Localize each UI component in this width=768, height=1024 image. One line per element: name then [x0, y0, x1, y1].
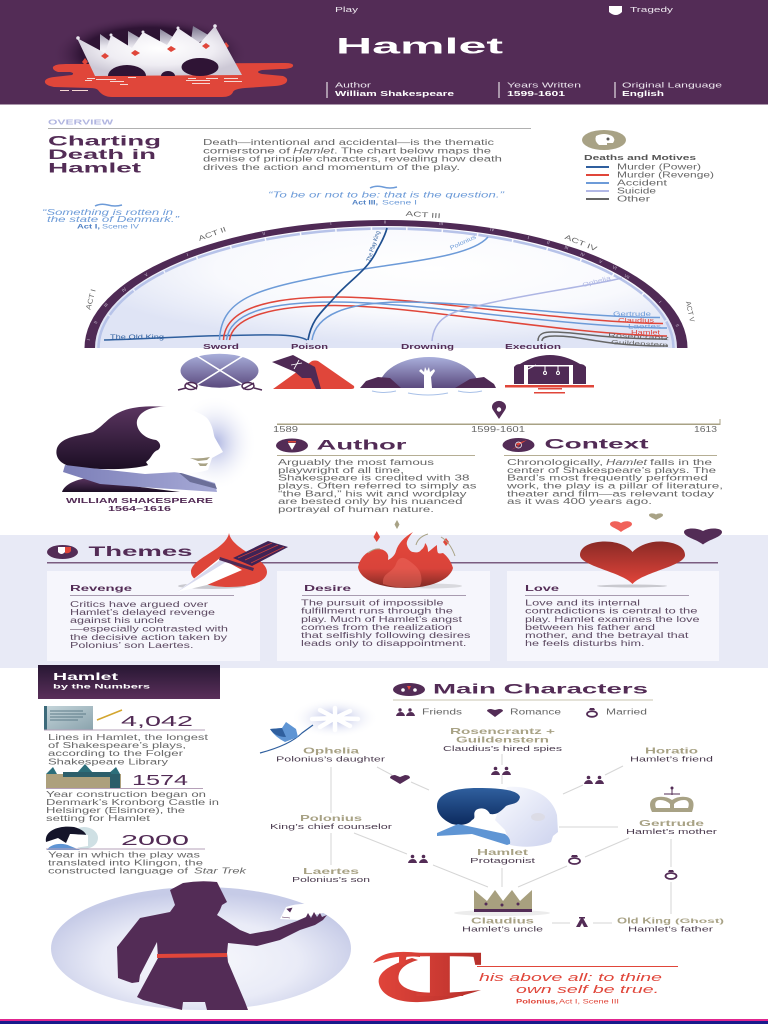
quote: something is rotten: Scene IV: [102, 224, 139, 230]
scene numerals: IV: [580, 252, 585, 258]
icon: map pin: [492, 401, 506, 419]
panel: author: Shakespeare is credited with 38: [278, 474, 470, 482]
icon: compass: [502, 438, 534, 452]
character labels: Polonius: [449, 235, 477, 252]
heading box: by the Numbers: [53, 684, 151, 690]
panel: author: “the Bard,” his wit and wordplay: [278, 490, 467, 498]
card: love: play. Hamlet examines the love: [525, 615, 700, 624]
scene numerals: I: [86, 339, 91, 341]
character: Polonius: Polonius: [300, 813, 362, 823]
scene numerals: VI: [612, 264, 618, 271]
character: Old King: [617, 916, 724, 934]
panel: context: work, the play is a pillar of literature,: [505, 482, 723, 490]
legend: deaths and motives: Accident: [617, 178, 668, 188]
quote: to be or not to be: “To be or not to be: that is the question.”: [268, 190, 506, 200]
card: desire: comes from the realization: [301, 623, 452, 632]
pull quote: [373, 938, 678, 1011]
panel: author: plays. Often referred to simply as: [278, 482, 477, 490]
relationship connectors: [331, 754, 671, 923]
character: Old King: Hamlet’s father: [628, 924, 714, 934]
scene numerals: V: [598, 259, 603, 265]
character: Gertrude: [626, 786, 718, 836]
stat: lines: [44, 706, 209, 766]
stat: castle: [46, 764, 219, 823]
legend: deaths and motives: [582, 130, 715, 204]
character: Rosencrantz and Guildenstern: Rosencrantz +: [450, 726, 555, 736]
scene numerals: II: [547, 240, 550, 245]
stat: castle: Helsinger (Elsinore), the: [46, 806, 185, 815]
character: Laertes: [292, 866, 370, 884]
panel: context: falls in the: [650, 458, 712, 467]
stat: klingon: translated into Klingon, the: [48, 858, 203, 868]
legend: relationships: Married: [606, 708, 647, 716]
stat: lines: 4,042: [121, 713, 193, 730]
overview paragraph: Hamlet: [293, 146, 335, 156]
act labels: ACT III: [405, 211, 441, 220]
method: drowning: [360, 342, 496, 395]
drop cap: [373, 938, 483, 1011]
character labels: Claudius: [618, 318, 654, 324]
overview paragraph: drives the action and momentum of the play.: [203, 163, 460, 172]
legend: deaths and motives: Murder (Power): [617, 162, 702, 172]
chart: death arc: [84, 211, 695, 349]
stat: lines: Shakespeare Library: [48, 758, 168, 766]
character: Hamlet: Hamlet: [477, 847, 528, 857]
panel: context: Chronologically,: [507, 458, 603, 467]
character: Hamlet: Protagonist: [470, 856, 535, 865]
header banner: [0, 0, 768, 104]
card: desire: leads only to disappointment.: [301, 639, 466, 648]
icon: skull in hand: [280, 904, 327, 920]
stat: klingon: constructed language of: [48, 866, 189, 876]
scene numerals: IV: [490, 227, 495, 232]
card: love: mother, and the betrayal that: [525, 631, 690, 640]
stat: lines: according to the Folger: [48, 749, 184, 758]
heading: charting death: Charting: [48, 132, 161, 148]
character: Gertrude: Gertrude: [639, 818, 704, 828]
icon: pen nib: [276, 438, 308, 452]
years meta: 1599-1601: [507, 89, 565, 98]
card: revenge: [47, 571, 260, 661]
overview paragraph: [203, 138, 502, 172]
quote: something is rotten: “Something is rotten in: [42, 208, 174, 217]
panel: author: are bested only by his nuanced: [278, 497, 462, 506]
author meta: Author: [335, 80, 372, 90]
card: revenge: —especially contrasted with: [70, 624, 228, 634]
character: Horatio: [630, 746, 713, 764]
panel: author: Author: [316, 438, 408, 452]
card: desire: [277, 571, 490, 661]
heading box: Hamlet: [53, 672, 119, 683]
panel: author: playwright of all time,: [278, 466, 404, 475]
act labels: ACT I: [85, 289, 98, 311]
scene numerals: VII: [623, 273, 630, 280]
bottom strip: [0, 1019, 768, 1024]
character: Ophelia: Polonius’s daughter: [276, 754, 386, 764]
legend: relationships: [396, 708, 647, 717]
timeline: 1589: [273, 425, 298, 434]
panel: context: Hamlet: [606, 458, 648, 467]
icon: document and quill: [44, 706, 122, 730]
character: Claudius: [454, 890, 550, 934]
method: execution: Execution: [505, 342, 562, 351]
icon: skull: [582, 130, 626, 150]
stat: castle: Year construction began on: [46, 790, 206, 799]
overview paragraph: cornerstone of: [203, 146, 291, 156]
card: revenge: Hamlet’s delayed revenge: [70, 608, 215, 617]
panel: by the numbers: [38, 665, 248, 876]
icon: flame: [358, 520, 462, 588]
character: Ophelia: Ophelia: [303, 746, 359, 756]
card: revenge: Critics have argued over: [70, 600, 209, 609]
death lines: [104, 228, 668, 346]
portrait: Shakespeare: [56, 395, 257, 513]
character labels: Guildenstern: [611, 340, 668, 349]
icon: Kronborg castle: [46, 764, 121, 789]
character labels: Ophelia: [582, 275, 612, 289]
scene numerals: [86, 220, 680, 341]
character: Laertes: Polonius’s son: [292, 875, 370, 884]
card: revenge: against his uncle: [70, 616, 164, 625]
scene numerals: II: [384, 220, 386, 224]
method: sword: [178, 342, 262, 390]
stat: castle: Denmark’s Kronborg Castle in: [46, 798, 219, 807]
character: Polonius: King’s chief counselor: [270, 822, 393, 831]
stat: klingon: Year in which the play was: [48, 850, 200, 860]
heading: main characters: Main Characters: [433, 680, 648, 696]
overview paragraph: Death—intentional and accidental—is the thematic: [203, 138, 494, 147]
language meta: [622, 80, 722, 98]
heading: charting death: Death in: [48, 146, 156, 162]
icon: blood drop and dagger: [177, 533, 288, 592]
scene numerals: I: [186, 252, 189, 257]
method: poison: [272, 342, 354, 389]
card: love: Love and its internal: [525, 598, 640, 608]
card: revenge: the decisive action taken by: [70, 633, 227, 642]
legend: relationships: Friends: [422, 708, 462, 716]
legend: deaths and motives: Suicide: [617, 186, 656, 196]
method: sword: Sword: [203, 342, 240, 351]
pull quote: his above all: to thine: [479, 972, 662, 984]
play label: Play: [335, 5, 358, 14]
panel: context: Context: [544, 436, 650, 452]
legend: deaths and motives: Murder (Revenge): [617, 170, 715, 180]
character labels: Hamlet: [631, 330, 660, 336]
card: revenge: Polonius’ son Laertes.: [70, 641, 194, 650]
character labels: Laertes: [628, 324, 661, 330]
character: Hamlet: [437, 787, 558, 865]
method: poison: Poison: [291, 342, 329, 351]
character labels: Gertrude: [613, 312, 652, 318]
heading: charting death: Hamlet: [48, 160, 142, 176]
stat: klingon: [46, 827, 248, 876]
years meta: Years Written: [507, 80, 581, 90]
act labels: [85, 211, 695, 323]
panel: context: as it was 400 years ago.: [507, 497, 652, 506]
scene numerals: III: [103, 302, 109, 308]
language meta: English: [622, 89, 665, 98]
character: Rosencrantz and Guildenstern: [443, 726, 563, 753]
title: Hamlet: [336, 34, 505, 58]
quote: something is rotten: the state of Denmark.”: [47, 215, 180, 224]
pull quote: own self be true.: [516, 984, 659, 996]
card: love: between his father and: [525, 623, 655, 632]
panel: themes: [0, 513, 768, 668]
character: Claudius: Hamlet’s uncle: [462, 924, 543, 934]
character: Polonius: [270, 813, 393, 831]
quote: something is rotten: [42, 204, 180, 230]
stat: klingon: 2000: [121, 832, 189, 849]
character labels: [110, 230, 669, 349]
card: desire: that selfishly following desires: [301, 631, 471, 640]
pull quote: Polonius,: [516, 1000, 559, 1006]
scene numerals: II: [675, 323, 680, 328]
timeline: 1599-1601: [471, 425, 525, 434]
quote: to be or not to be: [268, 186, 506, 206]
panel: main characters: [260, 680, 724, 934]
legend: deaths and motives: Other: [617, 194, 651, 204]
character: Old King: Old King: [617, 916, 671, 926]
illustration: Hamlet with skull: [51, 881, 351, 1010]
card: love: he feels disturbs him.: [525, 639, 644, 648]
pull quote: Act I, Scene III: [559, 1000, 619, 1006]
panel: author: [276, 438, 477, 514]
character: Horatio: Hamlet’s friend: [630, 754, 713, 764]
panel: context: center of Shakespeare’s plays. The: [507, 466, 716, 475]
quote: something is rotten: Act I,: [77, 224, 101, 230]
icon: Spock head: [46, 827, 98, 850]
scene numerals: III: [439, 221, 443, 226]
overview paragraph: demise of principle characters, revealing how death: [203, 154, 502, 164]
panel: author: Arguably the most famous: [278, 458, 434, 467]
character: Old King: (Ghost): [675, 918, 724, 925]
portrait: Shakespeare: 1564–1616: [108, 504, 171, 513]
stat: castle: 1574: [132, 772, 188, 789]
stat: lines: of Shakespeare’s plays,: [48, 741, 186, 750]
act labels: ACT V: [684, 301, 695, 323]
icon: hearts: [580, 513, 722, 588]
card: desire: Desire: [304, 584, 352, 593]
relationship icons: [390, 767, 676, 927]
legend: deaths and motives: Deaths and Motives: [584, 155, 696, 162]
character: Claudius: Claudius: [471, 916, 534, 926]
character labels: The Old King: [110, 335, 164, 341]
act labels: ACT II: [198, 226, 227, 243]
drop cap: T: [397, 938, 483, 1011]
character: Rosencrantz and Guildenstern: Claudius’s hired spies: [443, 744, 563, 753]
author meta: [335, 80, 454, 98]
heading box: [38, 665, 220, 699]
panel: author: portrayal of human nature.: [278, 505, 434, 514]
method: drowning: Drowning: [401, 342, 455, 351]
card: love: contradictions is central to the: [525, 606, 698, 616]
character labels: The Play King: [366, 230, 382, 263]
author meta: William Shakespeare: [335, 89, 454, 98]
scene numerals: I: [527, 235, 530, 240]
heading: charting death: [48, 132, 161, 176]
panel: context: Bard’s most frequently performed: [507, 474, 708, 482]
overview paragraph: . The chart below maps the: [334, 146, 491, 156]
scene numerals: III: [564, 245, 569, 251]
character: Gertrude: Hamlet’s mother: [626, 827, 718, 836]
years meta: [507, 80, 581, 98]
icon: tragedy mask: [609, 6, 622, 15]
overview label: OVERVIEW: [48, 118, 114, 126]
icon: characters: [393, 683, 425, 696]
icon: theatre masks: [47, 545, 78, 559]
panel: context: [502, 436, 723, 506]
card: desire: play. Much of Hamlet’s angst: [301, 615, 463, 624]
heading: themes: Themes: [88, 543, 193, 559]
genre label: Tragedy: [630, 5, 673, 14]
stat: klingon: Star Trek: [194, 866, 248, 876]
panel: context: theater and film—as relevant today: [507, 490, 714, 498]
character: Laertes: Laertes: [303, 866, 359, 876]
stat: lines: Lines in Hamlet, the longest: [48, 733, 209, 742]
portrait: Shakespeare: WILLIAM SHAKESPEARE: [66, 496, 213, 505]
scene numerals: V: [144, 272, 149, 278]
card: love: [507, 571, 719, 661]
scene numerals: IV: [121, 287, 127, 293]
character labels: Rosencrantz: [608, 333, 669, 342]
character: Rosencrantz and Guildenstern: Guildenstern: [456, 734, 549, 744]
scene numerals: II: [262, 231, 265, 236]
scene numerals: I: [330, 221, 332, 226]
timeline: 1613: [694, 425, 717, 434]
stat: castle: setting for Hamlet: [46, 814, 151, 823]
quote: to be or not to be: Scene I: [382, 200, 418, 206]
card: desire: fulfillment runs through the: [301, 606, 453, 616]
card: love: Love: [525, 584, 560, 593]
legend: relationships: Romance: [510, 708, 561, 716]
method: execution: [505, 342, 594, 394]
character: Ophelia: [260, 698, 386, 764]
icon: bloody crown: [45, 16, 293, 97]
character: Horatio: Horatio: [645, 746, 698, 756]
scene numerals: I: [658, 300, 662, 304]
card: revenge: Revenge: [70, 584, 133, 593]
language meta: Original Language: [622, 80, 722, 90]
card: desire: The pursuit of impossible: [301, 598, 444, 608]
quote: to be or not to be: Act III,: [352, 200, 378, 206]
timeline: [273, 401, 720, 434]
act labels: ACT IV: [563, 234, 598, 253]
scene numerals: II: [93, 320, 98, 325]
